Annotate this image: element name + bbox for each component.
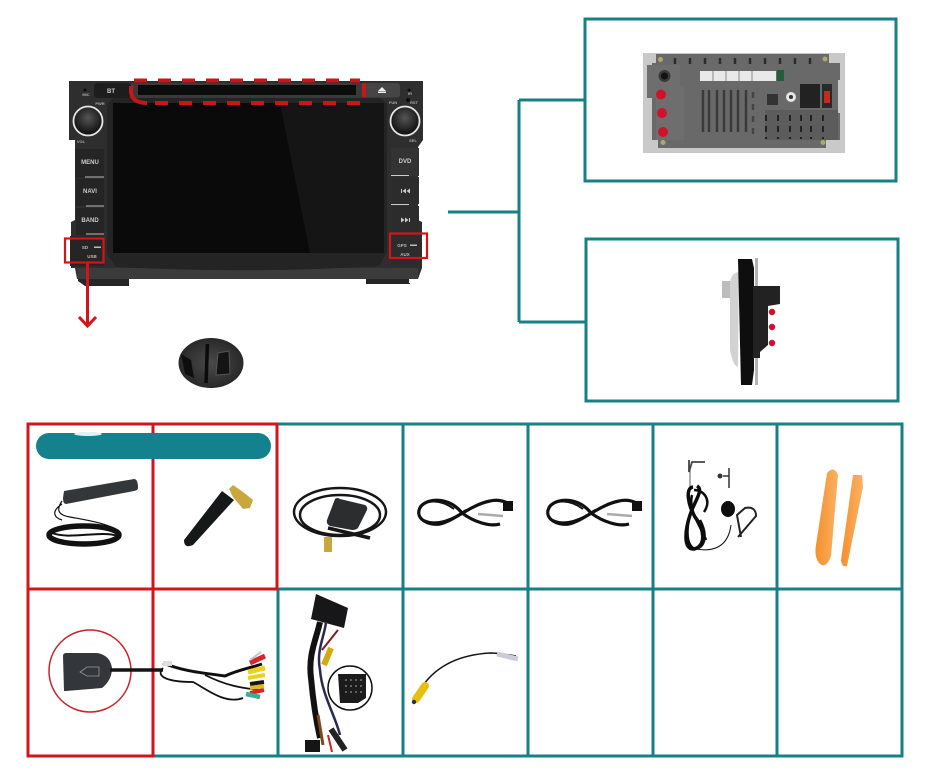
screen bezel <box>107 98 387 270</box>
small labels <box>77 91 419 144</box>
red circle callout with USB dongle <box>49 630 131 712</box>
panel: side view <box>586 239 898 401</box>
small labels: VOL <box>77 139 86 144</box>
item: USB cable 2 <box>548 500 642 525</box>
right socket <box>800 84 820 108</box>
item: USB cable 1 <box>419 500 513 525</box>
left buttons: USB <box>87 254 97 259</box>
red dashed highlight around disc slot <box>131 80 364 103</box>
rear block <box>753 286 780 358</box>
item: RCA cable harness <box>161 652 265 700</box>
eject button <box>364 83 400 97</box>
screen <box>113 103 384 253</box>
top notches <box>675 58 810 64</box>
connector white <box>700 71 776 81</box>
silver face <box>730 272 739 367</box>
BT button <box>94 83 131 98</box>
item: 4G antenna <box>49 479 138 544</box>
item: power harness <box>305 594 372 752</box>
right buttons: DVD <box>399 159 412 165</box>
jack <box>658 70 670 82</box>
item: WiFi antenna <box>184 485 253 546</box>
small labels: RST <box>410 100 419 105</box>
small labels: PWR <box>95 101 105 106</box>
small labels: IR <box>408 91 412 96</box>
item: dongle <box>63 653 163 691</box>
teal banner <box>36 432 271 459</box>
left buttons: SD <box>82 245 89 250</box>
mounting feet <box>78 279 410 286</box>
red highlight: left SD USB port <box>65 238 104 262</box>
item: GPS antenna <box>294 488 386 552</box>
BT button: BT <box>107 89 115 95</box>
rear chassis <box>643 53 845 153</box>
screws <box>660 59 825 142</box>
left knob <box>74 106 102 136</box>
connector lines <box>448 100 586 322</box>
top strip <box>94 83 400 98</box>
right buttons: AUX <box>400 252 410 257</box>
left buttons: BAND <box>81 218 99 224</box>
silver rail <box>755 258 758 385</box>
left buttons <box>70 149 104 266</box>
right buttons <box>391 148 421 266</box>
left buttons: MENU <box>81 160 99 166</box>
left buttons: NAVI <box>83 189 97 195</box>
knob stub <box>722 281 731 298</box>
red arrow down <box>79 263 96 326</box>
item: microphone <box>686 460 756 550</box>
unit body <box>69 81 423 279</box>
right buttons: GPS <box>397 243 407 248</box>
item: RCA camera cable <box>412 653 518 704</box>
right knob <box>390 106 420 136</box>
black front <box>738 259 754 385</box>
panel: rear view <box>585 19 896 181</box>
small labels: FUN <box>389 100 397 105</box>
red antenna ports <box>656 90 666 100</box>
lower trim <box>77 268 418 279</box>
teal grid lines <box>153 424 902 756</box>
slots <box>703 90 746 132</box>
head unit front view <box>69 81 423 286</box>
port closeup <box>178 338 244 388</box>
disc slot <box>138 85 356 95</box>
connector inset <box>328 666 372 710</box>
item: pry tools <box>815 469 863 566</box>
small labels: SEL <box>409 138 417 143</box>
white RCA port <box>786 92 796 102</box>
red highlight: right GPS AUX port <box>390 234 427 258</box>
red cell borders <box>28 424 277 756</box>
red ports <box>769 309 775 315</box>
parts grid <box>28 424 902 756</box>
small labels: MIC <box>82 92 90 97</box>
